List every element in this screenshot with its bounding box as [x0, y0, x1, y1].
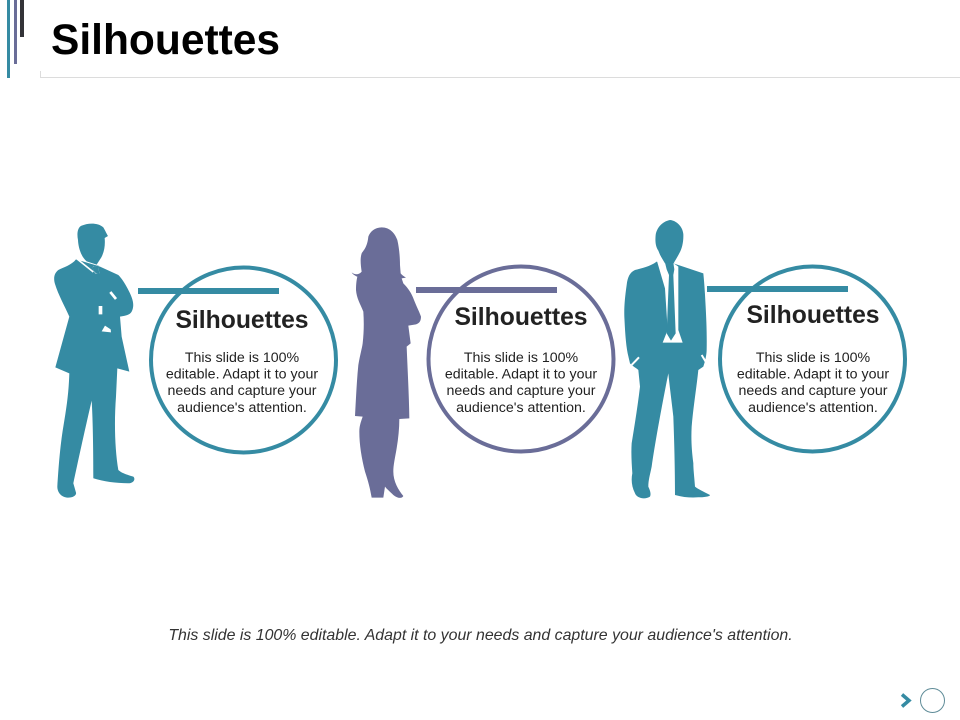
icon: man with hands in pockets [624, 220, 710, 498]
text block: audience's attention. [748, 400, 878, 416]
panel: person 3 [624, 220, 905, 498]
icon: woman [352, 227, 421, 498]
text block: This slide is 100% [185, 350, 300, 366]
title: Silhouettes [51, 17, 280, 64]
circle [428, 266, 614, 452]
circle [720, 266, 905, 452]
text block: audience's attention. [456, 400, 586, 416]
icon: next chevron [902, 694, 909, 706]
connector bar [138, 288, 279, 294]
text block: audience's attention. [177, 400, 307, 416]
heading: Silhouettes [175, 307, 309, 334]
text block: editable. Adapt it to your [737, 366, 889, 382]
icon: man with crossed arms [54, 224, 134, 498]
panel: person 1 [54, 224, 336, 498]
text block: needs and capture your [738, 383, 888, 399]
text block: This slide is 100% [756, 350, 871, 366]
circle [151, 268, 336, 452]
header rule [40, 71, 960, 78]
connector bar [707, 286, 848, 292]
header accent bars [7, 0, 24, 78]
text block: This slide is 100% [464, 350, 579, 366]
text block: needs and capture your [446, 383, 596, 399]
text block: editable. Adapt it to your [166, 366, 318, 382]
panel: person 2 [352, 227, 614, 498]
connector bar [416, 287, 557, 293]
heading: Silhouettes [746, 302, 880, 329]
text block: editable. Adapt it to your [445, 366, 597, 382]
text block: needs and capture your [167, 383, 317, 399]
icon: navigation circle [920, 688, 944, 712]
footer caption: This slide is 100% editable. Adapt it to your needs and capture your audience's attention. [168, 627, 793, 644]
heading: Silhouettes [454, 304, 588, 331]
